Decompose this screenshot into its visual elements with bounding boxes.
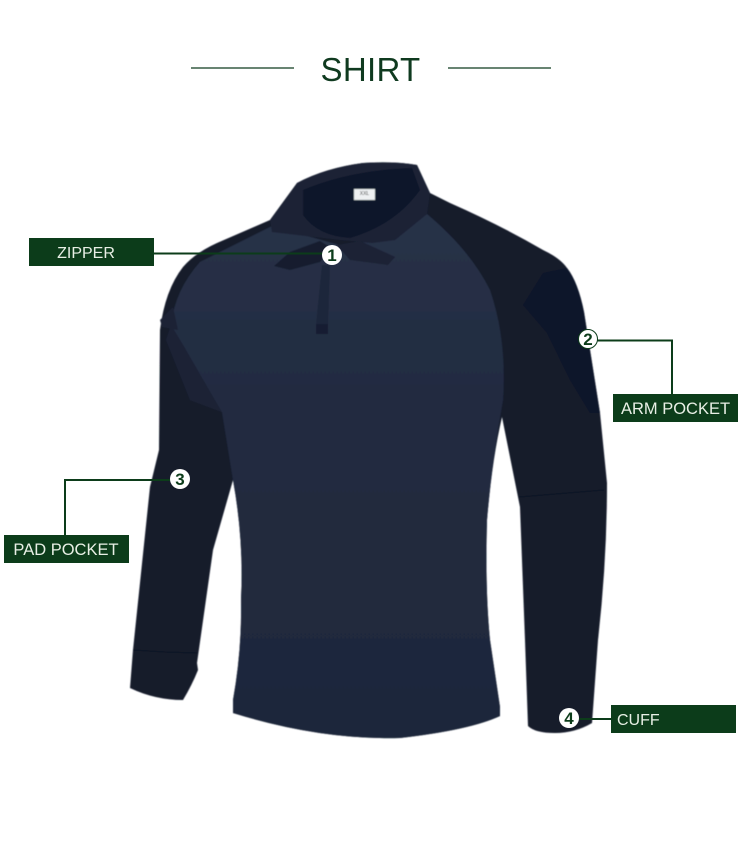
callout 4: cuff: CUFF xyxy=(617,712,660,729)
neck label xyxy=(354,189,375,200)
callout 3: pad pocket: 3 xyxy=(175,470,185,489)
callout 2: arm pocket: ARM POCKET xyxy=(621,400,730,418)
left cuff seam xyxy=(133,650,197,653)
collar inside xyxy=(303,168,420,238)
shirt silhouette and dark sleeves xyxy=(130,162,607,738)
arm pocket flap xyxy=(523,268,600,413)
left sleeve tab xyxy=(160,307,178,330)
callout 1: zipper: ZIPPER xyxy=(57,245,115,262)
shoulder pad panel xyxy=(166,325,222,412)
elbow seam right xyxy=(519,490,604,497)
zipper placket xyxy=(316,265,330,325)
callout 2: arm pocket xyxy=(578,330,738,422)
shirt illustration xyxy=(130,162,607,738)
callout 2: arm pocket: 2 xyxy=(583,330,593,349)
collar flap right xyxy=(337,241,395,265)
callout 4: cuff xyxy=(559,705,736,733)
title: SHIRT xyxy=(321,51,420,88)
callout 3: pad pocket: PAD POCKET xyxy=(13,541,119,559)
torso front panel xyxy=(171,214,504,738)
collar flap left xyxy=(274,241,331,270)
zipper pull xyxy=(316,324,328,334)
neck label: XXL xyxy=(360,191,369,197)
callout 1: zipper xyxy=(29,238,342,266)
collar outer xyxy=(270,162,430,243)
callout 1: zipper: 1 xyxy=(327,246,337,265)
callout 3: pad pocket xyxy=(4,469,190,563)
callout 4: cuff: 4 xyxy=(564,709,574,728)
